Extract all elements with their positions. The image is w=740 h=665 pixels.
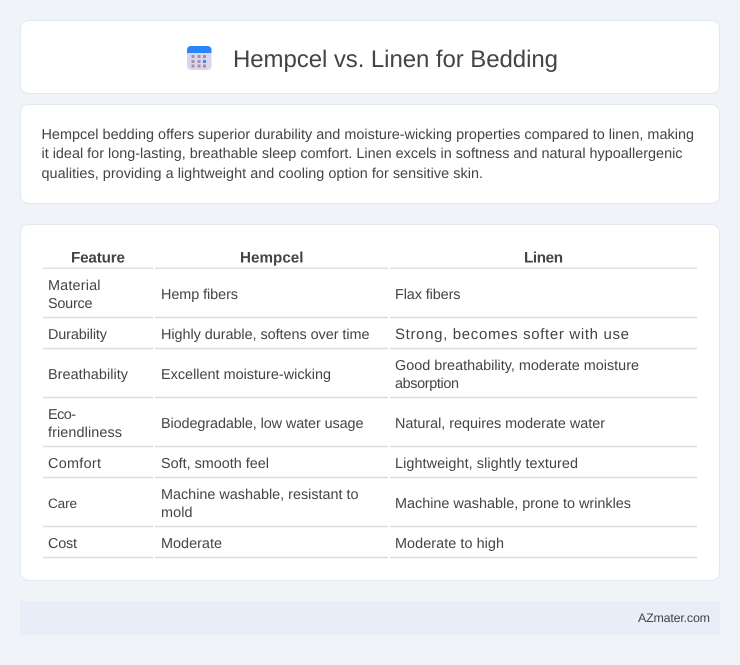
summary text: it ideal for long-lasting, breathable sleep comfort. Linen excels in softness and natural hypoallergenic	[42, 146, 682, 162]
row: eco-friendliness: friendliness	[48, 425, 122, 441]
panel: comparison table	[20, 224, 720, 580]
row: breathability: Excellent moisture-wicking	[161, 367, 331, 383]
summary text: Hempcel bedding offers superior durability and moisture-wicking properties compared to linen, making	[42, 127, 694, 143]
footer bar	[20, 601, 720, 635]
title: Hempcel vs. Linen for Bedding	[233, 46, 558, 73]
row: breathability: absorption	[395, 376, 459, 392]
row: care	[48, 487, 631, 521]
row: comfort: Comfort	[48, 456, 101, 472]
row: breathability: Breathability	[48, 367, 129, 383]
row: comfort: Soft, smooth feel	[161, 456, 269, 472]
row: material source: Source	[48, 296, 92, 312]
row: material source: Flax fibers	[395, 287, 460, 303]
row: material source	[48, 278, 460, 312]
row: care: mold	[161, 505, 192, 521]
row: cost: Cost	[48, 536, 77, 552]
summary text	[42, 127, 694, 182]
table header: Feature	[71, 250, 125, 266]
row: care: Care	[48, 496, 77, 511]
row: eco-friendliness: Natural, requires moderate water	[395, 416, 605, 432]
row: breathability: Good breathability, moderate moisture	[395, 358, 639, 374]
table header: Linen	[524, 250, 563, 266]
row: cost	[48, 536, 504, 552]
footer credit: AZmater.com	[638, 611, 710, 625]
table header: Hempcel	[240, 250, 304, 266]
table header	[71, 250, 563, 266]
row: durability	[48, 326, 629, 343]
summary text: qualities, providing a lightweight and cooling option for sensitive skin.	[42, 166, 483, 182]
row: durability: Durability	[48, 327, 108, 343]
row: durability: Highly durable, softens over time	[161, 327, 370, 343]
row: durability: Strong, becomes softer with use	[395, 326, 629, 343]
row: breathability	[48, 358, 639, 392]
panel: title card	[20, 20, 720, 94]
row: cost: Moderate	[161, 536, 222, 552]
panel: summary	[20, 104, 720, 204]
row: eco-friendliness	[48, 407, 605, 441]
row: care: Machine washable, prone to wrinkles	[395, 496, 631, 512]
row: material source: Material	[48, 278, 100, 294]
row: comfort: Lightweight, slightly textured	[395, 456, 578, 472]
row: eco-friendliness: Biodegradable, low water usage	[161, 416, 364, 432]
row: material source: Hemp fibers	[161, 287, 238, 303]
row: care: Machine washable, resistant to	[161, 487, 358, 503]
icon: calendar	[187, 46, 212, 70]
row: comfort	[48, 456, 578, 472]
row: eco-friendliness: Eco-	[48, 407, 76, 423]
row: cost: Moderate to high	[395, 536, 504, 552]
